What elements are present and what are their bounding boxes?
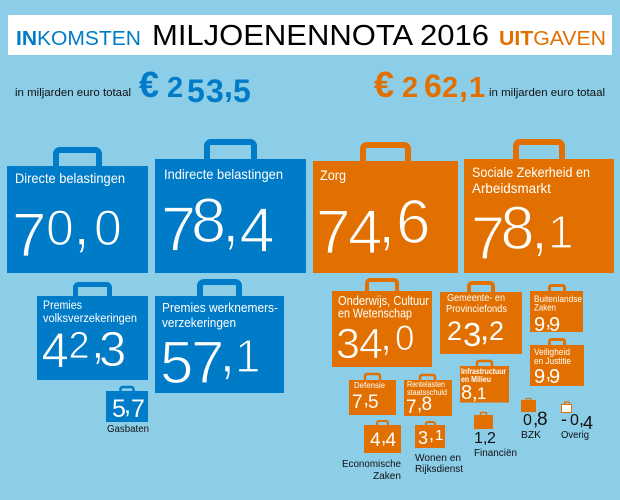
case: infrastructuur en milieu: 1 — [477, 384, 486, 403]
case: defensie: Defensie — [354, 380, 385, 390]
label: bzk: BZK — [521, 429, 541, 441]
case: gemeente- en provinciefonds: 2 — [447, 316, 462, 346]
case: financien: 1 — [474, 430, 483, 447]
total expenditure: , — [459, 68, 468, 104]
case: buitenlandse zaken: Buitenlandse — [534, 294, 582, 305]
label: gasbaten: Gasbaten — [107, 423, 149, 435]
case: premies volksverzekeringen: , — [91, 315, 105, 369]
case: directe belastingen: 7 — [12, 201, 46, 270]
case: zorg: 7 — [316, 198, 350, 267]
case: gemeente- en provinciefonds: Provinciefonds — [446, 303, 507, 315]
case: economische zaken: 4 — [386, 430, 396, 451]
case: directe belastingen: Directe belastingen — [15, 171, 125, 186]
case: bzk — [521, 398, 548, 441]
case: wonen en rijksdienst: 1 — [435, 427, 443, 444]
case: veiligheid en justitie: en Justitie — [534, 356, 571, 367]
case: buitenlandse zaken: Zaken — [534, 302, 556, 314]
case: infrastructuur en milieu: 8 — [461, 382, 472, 404]
case: financien: , — [483, 430, 487, 447]
case: indirecte belastingen: 8 — [191, 186, 226, 256]
case: economische zaken: 4 — [370, 430, 381, 451]
case: rentelasten staatsschuld: Rentelasten — [407, 380, 445, 389]
case: onderwijs, cultuur en wetenschap: Onderwijs, Cultuur — [338, 294, 429, 308]
case: financien: 2 — [487, 430, 496, 447]
case: defensie: 7 — [352, 392, 363, 413]
case: wonen en rijksdienst — [415, 422, 463, 475]
case: bzk: 8 — [537, 409, 548, 430]
case: veiligheid en justitie: Veiligheid — [534, 347, 570, 358]
case: sociale zekerheid en arbeidsmarkt: , — [531, 194, 548, 262]
total income: 5 — [233, 73, 251, 109]
total expenditure: 6 — [424, 68, 442, 104]
case: premies volksverzekeringen: 3 — [99, 323, 126, 377]
case: overig — [561, 402, 593, 441]
heading: miljoenennota 2016: MILJOENENNOTA 2016 — [152, 20, 489, 52]
case: sociale zekerheid en arbeidsmarkt: 8 — [500, 194, 534, 262]
case: directe belastingen: 0 — [46, 200, 74, 256]
case: buitenlandse zaken: 9 — [534, 314, 545, 336]
case: gemeente- en provinciefonds: 2 — [489, 316, 504, 346]
case: gemeente- en provinciefonds: , — [480, 310, 489, 347]
case: gasbaten: , — [124, 391, 131, 419]
case: infrastructuur en milieu: Infrastructuur — [461, 367, 506, 376]
total expenditure: in miljarden euro totaal — [489, 87, 605, 99]
case: gasbaten: 5 — [112, 395, 126, 423]
case: sociale zekerheid en arbeidsmarkt: 1 — [548, 206, 574, 258]
case: defensie: , — [364, 389, 369, 410]
case: premies werknemersverzekeringen: , — [219, 318, 236, 385]
heading: uitgaven: UITGAVEN — [499, 28, 606, 50]
case: veiligheid en justitie: , — [546, 362, 551, 384]
case: buitenlandse zaken — [530, 286, 583, 336]
case: premies volksverzekeringen — [37, 284, 148, 380]
case: economische zaken: Zaken — [373, 470, 401, 482]
case: buitenlandse zaken: , — [546, 310, 551, 332]
case: onderwijs, cultuur en wetenschap — [332, 280, 432, 368]
case: veiligheid en justitie: 9 — [549, 366, 560, 388]
case: premies volksverzekeringen: 2 — [68, 325, 90, 367]
case: directe belastingen: , — [73, 190, 90, 259]
case: financien — [474, 412, 517, 459]
total income: € — [139, 64, 159, 105]
label: wonen en rijksdienst: Wonen en — [415, 452, 461, 464]
case: onderwijs, cultuur en wetenschap: , — [380, 312, 392, 360]
case: zorg: 6 — [396, 188, 430, 257]
case: rentelasten staatsschuld: 7 — [406, 397, 417, 418]
total income: 2 — [167, 72, 183, 104]
label: economische zaken: Economische — [342, 458, 401, 470]
case: wonen en rijksdienst: Rijksdienst — [415, 463, 463, 475]
case: overig: 0 — [570, 412, 579, 429]
case: premies werknemersverzekeringen: verzekeringen — [162, 316, 236, 330]
case: premies werknemersverzekeringen: 5 — [160, 329, 193, 396]
case: sociale zekerheid en arbeidsmarkt: Sociale Zekerheid en — [472, 165, 590, 180]
case: zorg — [313, 145, 458, 273]
case: zorg: 4 — [348, 198, 382, 267]
case: infrastructuur en milieu: en Milieu — [461, 375, 491, 384]
case: gemeente- en provinciefonds: 3 — [463, 316, 481, 353]
case: premies volksverzekeringen: 4 — [42, 324, 69, 378]
case: sociale zekerheid en arbeidsmarkt: Arbeidsmarkt — [472, 181, 551, 196]
case: overig: , — [579, 409, 584, 429]
case: onderwijs, cultuur en wetenschap: en Wetenschap — [338, 306, 412, 320]
case: onderwijs, cultuur en wetenschap: 3 — [336, 320, 360, 368]
case: sociale zekerheid en arbeidsmarkt: 7 — [471, 204, 505, 272]
total expenditure: 2 — [402, 72, 418, 104]
case: directe belastingen: 0 — [94, 200, 122, 256]
case: gasbaten — [106, 387, 149, 435]
case: indirecte belastingen: 4 — [240, 196, 275, 266]
case: overig: - — [561, 409, 567, 429]
case: buitenlandse zaken: 9 — [549, 314, 560, 336]
case: veiligheid en justitie — [530, 340, 584, 388]
case: rentelasten staatsschuld: 8 — [422, 394, 432, 415]
total expenditure — [374, 64, 605, 105]
case: gemeente- en provinciefonds: Gemeente- en — [447, 292, 505, 304]
case: economische zaken: , — [381, 427, 386, 448]
case: premies werknemersverzekeringen: 7 — [191, 329, 224, 396]
case: indirecte belastingen: , — [222, 186, 240, 256]
total expenditure: € — [374, 64, 394, 105]
case: zorg: Zorg — [320, 167, 346, 183]
case: wonen en rijksdienst: 3 — [418, 428, 428, 448]
case: infrastructuur en milieu — [460, 361, 509, 404]
total income — [15, 64, 251, 109]
case: gasbaten: 7 — [131, 395, 145, 423]
case: infrastructuur en milieu: , — [472, 382, 478, 404]
label: financien: Financiën — [474, 447, 517, 459]
case: veiligheid en justitie: 9 — [534, 366, 545, 388]
case: bzk: , — [533, 409, 538, 430]
title banner — [8, 15, 612, 55]
case: rentelasten staatsschuld: , — [417, 394, 422, 415]
case: zorg: , — [378, 188, 395, 257]
case: directe belastingen — [7, 150, 148, 273]
total expenditure: 2 — [442, 72, 458, 104]
total expenditure: 1 — [469, 72, 485, 104]
case: indirecte belastingen — [155, 142, 306, 273]
label: overig: Overig — [561, 429, 589, 441]
case: gemeente- en provinciefonds — [440, 283, 522, 354]
heading: inkomsten: INKOMSTEN — [16, 28, 141, 50]
case: indirecte belastingen: Indirecte belastingen — [164, 166, 283, 182]
total income: , — [224, 68, 233, 104]
case: premies volksverzekeringen: volksverzekeringen — [43, 313, 137, 325]
case: overig: 4 — [583, 413, 593, 433]
case: rentelasten staatsschuld: staatsschuld — [407, 388, 447, 397]
case: premies werknemersverzekeringen: 1 — [235, 330, 261, 382]
case: premies werknemersverzekeringen: Premies werknemers- — [162, 301, 278, 315]
total income: 3 — [206, 73, 224, 109]
total income: in miljarden euro totaal — [15, 87, 131, 99]
case: rentelasten staatsschuld — [404, 375, 452, 418]
total income: 5 — [187, 73, 205, 109]
case: sociale zekerheid en arbeidsmarkt — [464, 142, 614, 273]
case: premies werknemersverzekeringen — [155, 282, 284, 396]
case: onderwijs, cultuur en wetenschap: 0 — [395, 319, 414, 358]
case: defensie — [349, 374, 396, 415]
case: premies volksverzekeringen: Premies — [43, 300, 82, 312]
case: bzk: 0 — [523, 412, 532, 429]
case: indirecte belastingen: 7 — [161, 195, 196, 265]
case: defensie: 5 — [368, 392, 379, 413]
case: wonen en rijksdienst: , — [429, 424, 434, 444]
case: economische zaken — [342, 421, 401, 482]
case: onderwijs, cultuur en wetenschap: 4 — [359, 320, 383, 368]
